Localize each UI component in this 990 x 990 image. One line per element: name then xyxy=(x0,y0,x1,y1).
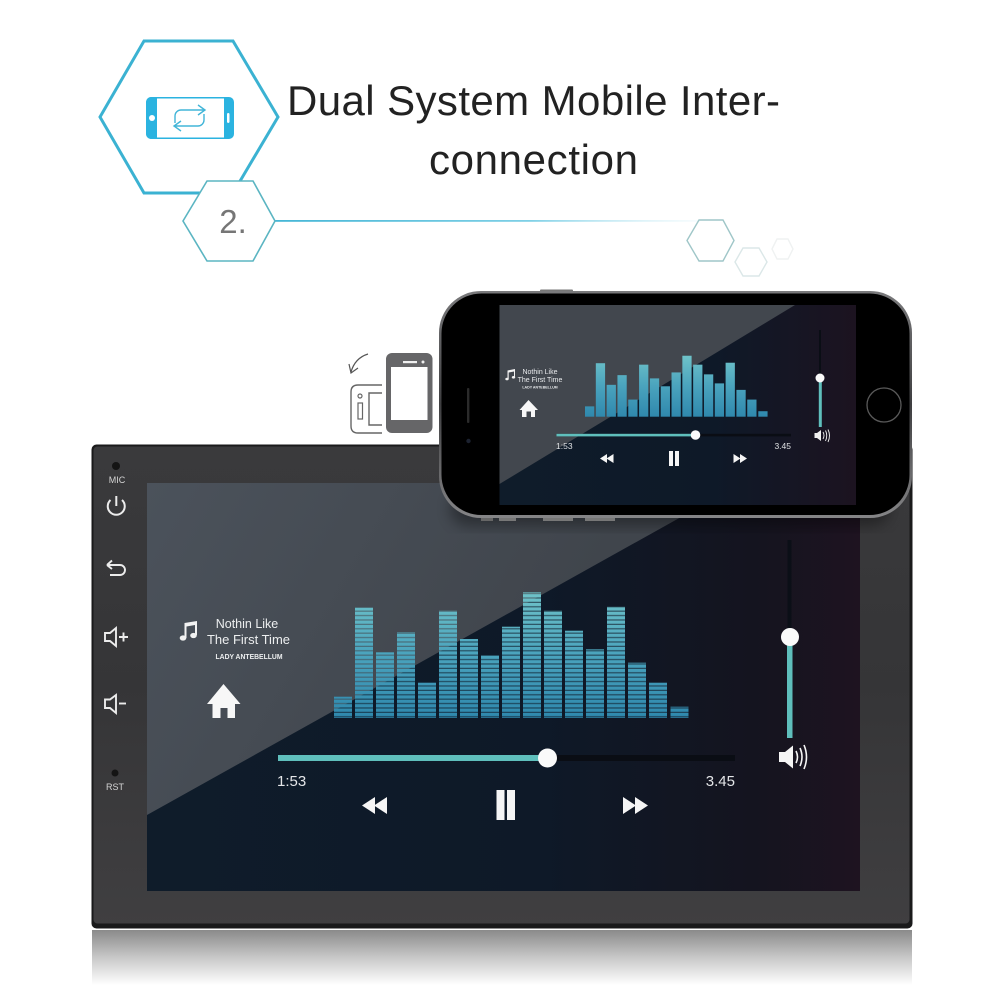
equalizer small xyxy=(585,356,768,417)
home button xyxy=(867,388,901,422)
icon: volume down xyxy=(105,695,126,713)
number badge hexagon xyxy=(183,181,275,261)
song title: Nothin Like xyxy=(216,617,278,631)
reflection under head unit xyxy=(92,930,912,985)
number: 2. xyxy=(219,203,247,240)
icon: phone swap xyxy=(146,97,234,139)
reset xyxy=(106,770,125,792)
icon: volume xyxy=(779,745,806,769)
camera xyxy=(466,439,471,443)
panel: smartphone xyxy=(439,290,912,521)
decorative hexagons xyxy=(687,220,793,276)
song title small: Nothin Like xyxy=(522,369,558,376)
music note small xyxy=(505,369,515,380)
title: connection xyxy=(429,136,638,183)
earpiece xyxy=(467,388,469,423)
title: Dual System Mobile Inter- xyxy=(287,77,780,124)
song title small xyxy=(518,369,562,390)
icon: pause xyxy=(496,790,515,820)
reset: RST xyxy=(106,782,125,792)
icon: home small xyxy=(520,400,538,417)
song title small: The First Time xyxy=(518,377,562,384)
icon: volume small xyxy=(814,430,830,442)
icon: back xyxy=(107,560,125,575)
phone screen xyxy=(500,305,856,505)
transport icons small xyxy=(600,451,747,466)
icon: phone connect xyxy=(349,353,432,433)
song title: The First Time xyxy=(207,632,290,647)
times small: 1:53 xyxy=(556,441,573,451)
progress bar xyxy=(278,748,735,768)
song title small: LADY ANTEBELLUM xyxy=(522,386,558,390)
icon: forward xyxy=(623,797,648,814)
times small xyxy=(556,443,791,449)
panel: head unit screen xyxy=(147,483,860,891)
mic: MIC xyxy=(109,475,126,485)
icon: music note xyxy=(180,621,197,641)
connector line xyxy=(275,220,700,222)
volume slider xyxy=(781,540,799,738)
icon: rewind xyxy=(362,797,387,814)
panel: car head unit xyxy=(92,444,912,928)
icon: large hexagon with phone xyxy=(100,41,278,193)
vol slider small xyxy=(816,330,824,427)
title xyxy=(287,77,780,183)
mic xyxy=(109,462,126,485)
time elapsed: 1:53 xyxy=(277,773,306,790)
icon: volume up xyxy=(105,628,128,646)
phone shadow xyxy=(450,490,890,526)
song title xyxy=(207,617,290,661)
progress small xyxy=(556,430,791,440)
song title: LADY ANTEBELLUM xyxy=(216,654,283,661)
times small: 3.45 xyxy=(774,441,791,451)
time total: 3.45 xyxy=(706,773,735,790)
side controls xyxy=(105,462,128,792)
icon: power xyxy=(108,496,125,515)
icon: home xyxy=(207,684,240,718)
